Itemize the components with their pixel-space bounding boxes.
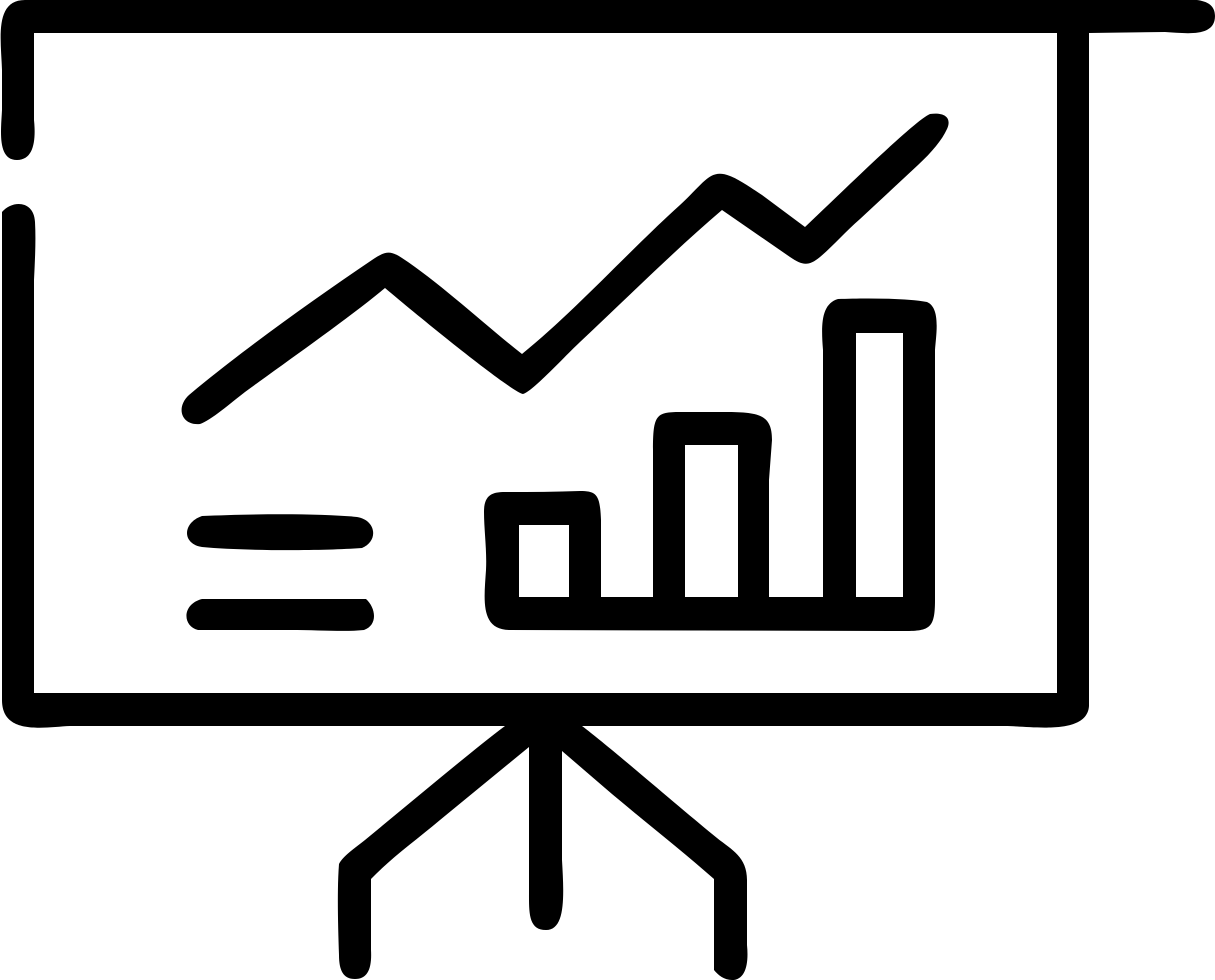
text line 2: [186, 599, 374, 631]
text line 1: [187, 514, 373, 550]
line chart: [182, 114, 949, 424]
bar chart: [484, 298, 937, 631]
